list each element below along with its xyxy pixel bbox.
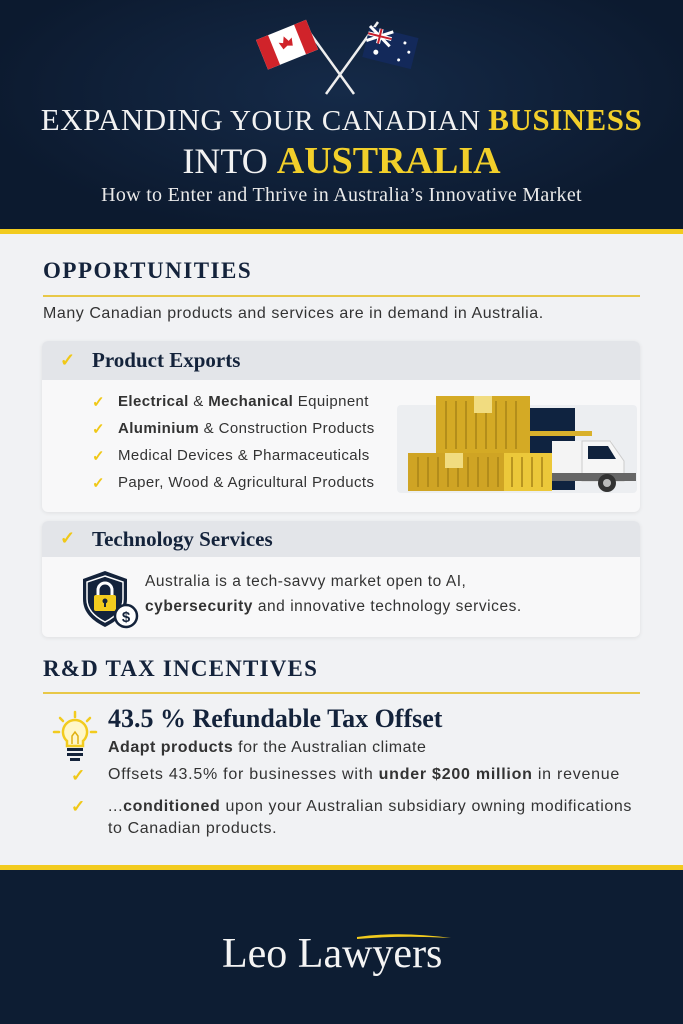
panel: technology services [42,521,640,637]
export list: Medical Devices & Pharmaceuticals [118,447,370,464]
icon: light bulb [52,710,98,761]
panel header: Technology Services [92,527,273,551]
R&D content: Adapt products for the Australian climate [108,739,426,756]
panel: product exports [42,341,640,512]
icon: shield lock [83,571,138,628]
text: tech description [145,573,522,615]
export list: ✓ [92,421,105,438]
export list [92,393,375,492]
logo: Leo Lawyers: Leo Lawyers [222,931,442,977]
R&D content: ✓ [71,766,85,785]
panel header [42,521,640,557]
export list: Aluminium & Construction Products [118,420,375,437]
illustration: containers and truck [397,396,637,493]
R&D content: 43.5 % Refundable Tax Offset [108,704,442,733]
text: tech description: Australia is a tech-savvy market open to AI, [145,573,466,590]
footer background [0,870,683,1024]
export list: Electrical & Mechanical Equipnent [118,393,369,410]
R&D content: ✓ [71,797,85,816]
panel header: ✓ [60,528,75,548]
text: tech description: cybersecurity and innovative technology services. [145,598,522,615]
gold divider header [0,229,683,234]
intro text: Many Canadian products and services are in demand in Australia. [43,305,544,322]
heading: opportunities: OPPORTUNITIES [43,258,252,283]
export list: ✓ [92,394,105,411]
heading: R&D tax incentives: R&D TAX INCENTIVES [43,656,318,681]
export list: ✓ [92,475,105,492]
panel header: Product Exports [92,348,240,372]
R&D content: ...conditioned upon your Australian subsidiary owning modifications [108,798,632,815]
R&D content [71,704,632,837]
title: EXPANDING YOUR CANADIAN BUSINESS [41,102,642,137]
subtitle: How to Enter and Thrive in Australia’s Innovative Market [101,184,582,206]
panel header [42,341,640,380]
title [41,102,642,182]
R&D content: to Canadian products. [108,820,277,837]
export list: Paper, Wood & Agricultural Products [118,474,374,491]
icon: shield lock: $ [122,609,131,626]
icon: crossed flags [256,20,418,95]
header background [0,0,683,229]
R&D content: Offsets 43.5% for businesses with under $200 million in revenue [108,766,620,783]
title: INTO AUSTRALIA [182,140,501,182]
panel header: ✓ [60,350,75,370]
export list: ✓ [92,448,105,465]
gold divider footer [0,865,683,870]
